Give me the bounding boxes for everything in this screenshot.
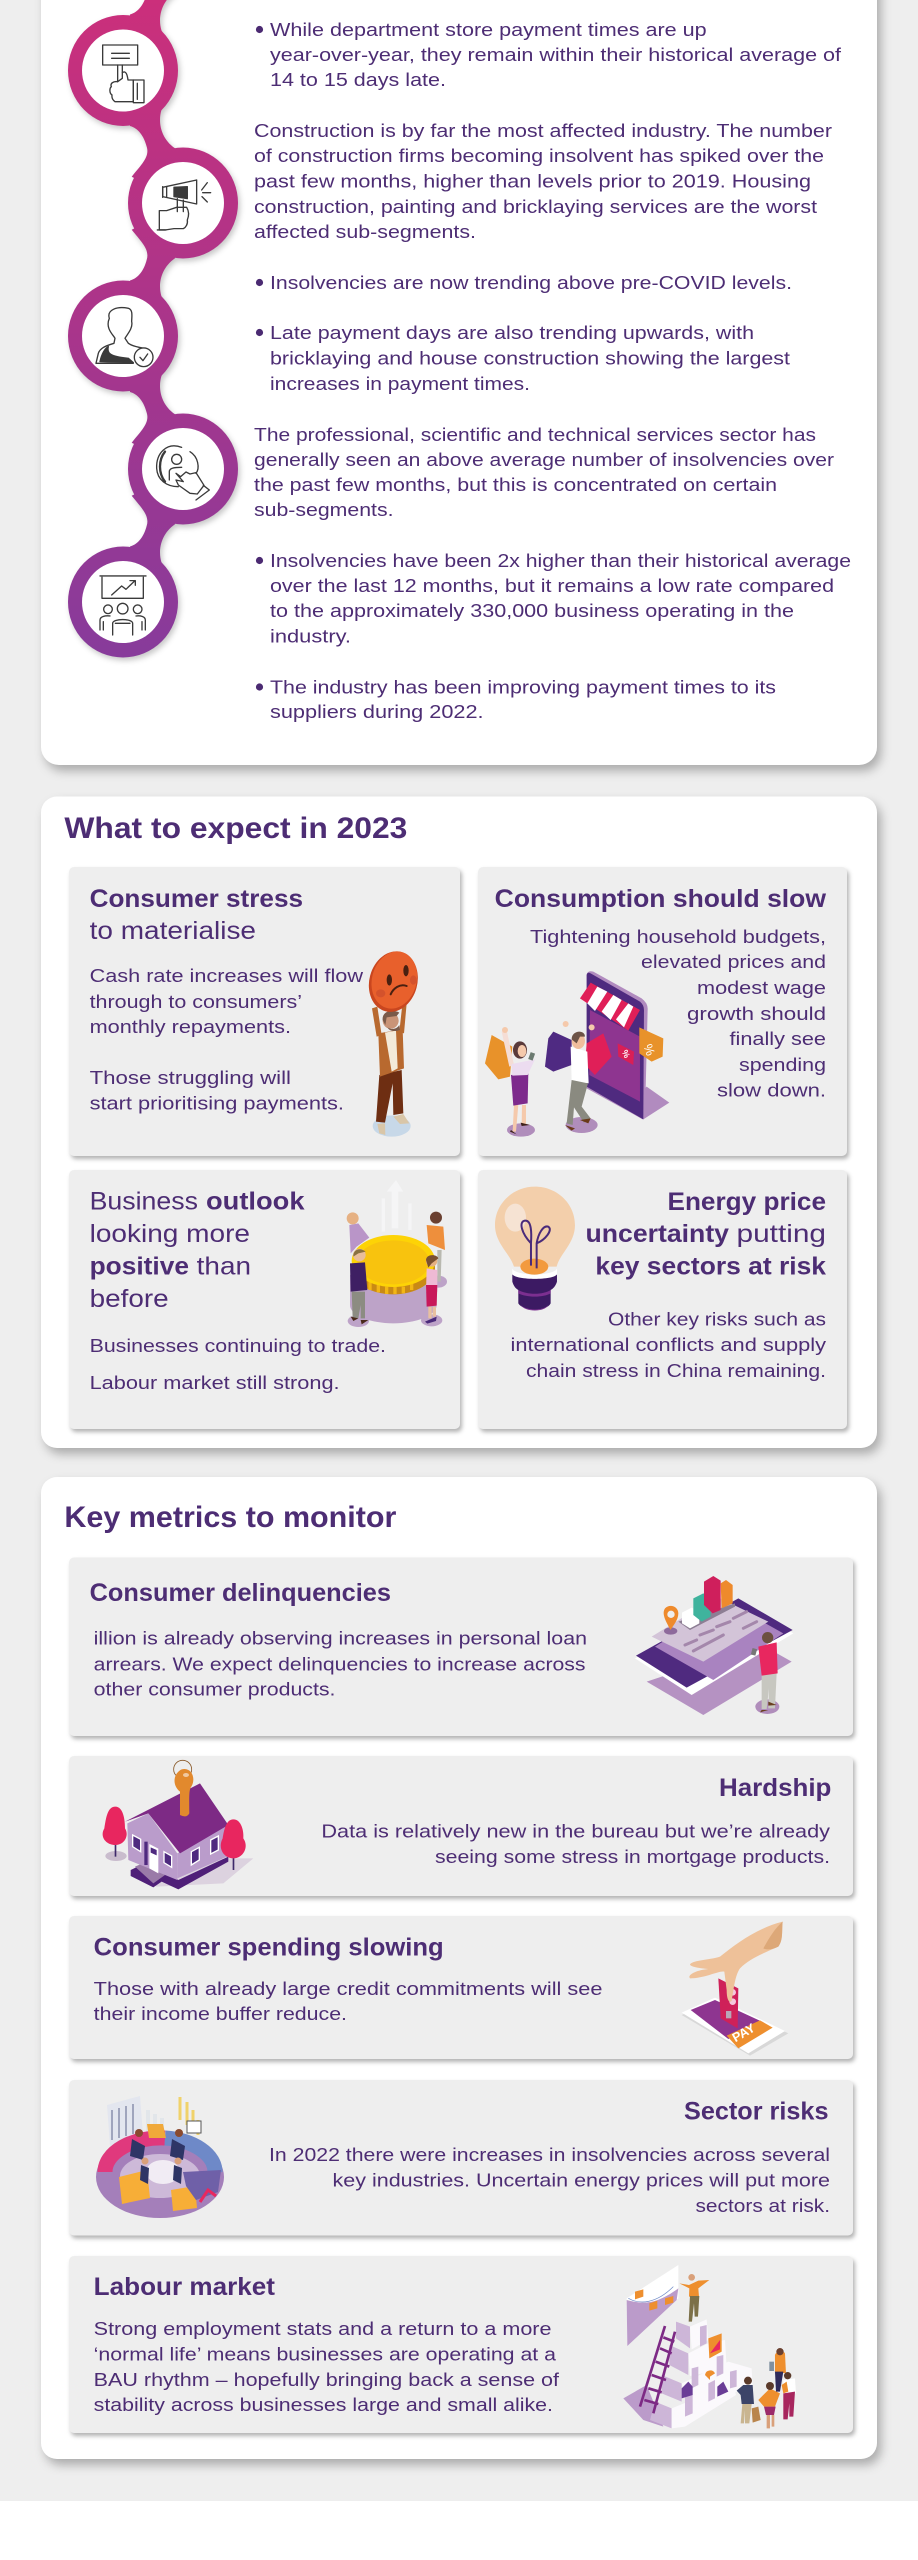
illustration: house with key [103, 1760, 253, 1889]
card: business outlook: outlook [206, 1188, 305, 1216]
text block: professional services: suppliers during 2022. [270, 701, 484, 722]
illustration: hand paying with phone [682, 1922, 788, 2056]
illustration: shoppers and phone store: % [620, 1048, 632, 1060]
text block: professional services: sub-segments. [254, 499, 394, 520]
card: consumer delinquencies: other consumer products. [94, 1679, 336, 1700]
card: consumption should slow: Tightening household budgets, [530, 926, 826, 947]
illustration: hand paying with phone: PAY [730, 2021, 758, 2045]
card: consumption should slow: slow down. [717, 1080, 826, 1100]
icon: person with check badge [96, 308, 153, 367]
card: energy price uncertainty: chain stress in China remaining. [526, 1360, 826, 1381]
card: labour market: Labour market [94, 2273, 276, 2301]
panel: key metrics to monitor [41, 1477, 877, 2459]
panel: what to expect in 2023 [41, 796, 877, 1448]
text block: professional services: Insolvencies have been 2x higher than their historical average [270, 550, 851, 571]
card: energy price uncertainty: Energy price [668, 1188, 826, 1216]
card: consumption should slow: elevated prices and [641, 951, 826, 972]
card: labour market: ‘normal life’ means businesses are operating at a [94, 2344, 557, 2365]
card: consumer delinquencies: Consumer delinquencies [90, 1579, 391, 1607]
card: consumer spending slowing: Consumer spending slowing [94, 1934, 444, 1962]
card: consumer stress: to materialise [90, 917, 256, 945]
card: consumer stress: start prioritising payments. [90, 1092, 344, 1114]
text block: professional services: The professional, scientific and technical services sector has [254, 424, 816, 445]
icon: hand pressing profile [157, 446, 209, 500]
panel: industry insights [41, 0, 877, 765]
card: energy price uncertainty: key sectors at risk [595, 1253, 826, 1281]
card: business outlook: positive [90, 1253, 189, 1281]
icon: hand with megaphone [157, 180, 211, 230]
text block: construction: construction, painting and bricklaying services are the worst [254, 196, 817, 217]
card: business outlook: looking more [90, 1220, 250, 1248]
icon: thumbs up sign [103, 45, 144, 103]
text block: department stores: While department store payment times are up [270, 19, 707, 40]
card: energy price uncertainty: Other key risks such as [608, 1308, 826, 1330]
text block: department stores: 14 to 15 days late. [270, 69, 446, 90]
card: business outlook: than [197, 1253, 251, 1281]
illustration: shoppers and phone store: % [640, 1042, 657, 1058]
card: consumption should slow: Consumption should slow [495, 885, 827, 913]
text block: professional services: industry. [270, 626, 351, 647]
card: labour market [69, 2256, 853, 2433]
card: sector risks: sectors at risk. [696, 2195, 830, 2216]
card: consumption should slow: finally see [730, 1028, 826, 1049]
card: consumer spending slowing [69, 1916, 853, 2059]
card: labour market: Strong employment stats and a return to a more [94, 2318, 551, 2339]
text block: professional services: to the approximately 330,000 business operating in the [270, 600, 794, 621]
text block: professional services: the past few months, but this is concentrated on certain [254, 474, 777, 495]
card: labour market: stability across businesses large and small alike. [94, 2394, 553, 2415]
card: consumer spending slowing: their income buffer reduce. [94, 2003, 347, 2024]
text block: construction: of construction firms becoming insolvent has spiked over the [254, 145, 824, 166]
card: consumer stress [69, 867, 460, 1156]
card: consumption should slow: modest wage [697, 977, 826, 998]
card: energy price uncertainty: international conflicts and supply [510, 1334, 827, 1355]
illustration: shoppers and phone store [485, 971, 669, 1137]
card: sector risks: Sector risks [684, 2098, 828, 2126]
text block: construction: past few months, higher than levels prior to 2019. Housing [254, 170, 811, 192]
card: hardship: Data is relatively new in the bureau but we’re already [321, 1821, 831, 1842]
illustration: man lifting sad face [362, 946, 424, 1137]
card: hardship: Hardship [719, 1774, 831, 1802]
card: business outlook: Business [90, 1188, 198, 1216]
text block: construction: affected sub-segments. [254, 221, 476, 242]
heading: What to expect in 2023 [64, 812, 407, 845]
card: consumer stress: Those struggling will [90, 1067, 291, 1088]
card: consumption should slow [478, 867, 847, 1156]
card: consumption should slow: spending [739, 1054, 826, 1075]
card: consumer spending slowing: Those with already large credit commitments will see [94, 1978, 602, 1999]
text block: construction: bricklaying and house construction showing the largest [270, 348, 790, 369]
illustration: light bulb [495, 1187, 575, 1310]
illustration: pyramid, ladder and team [623, 2265, 796, 2428]
text block: professional services: over the last 12 months, but it remains a low rate compared [270, 575, 834, 596]
icon: presentation with audience [100, 576, 146, 635]
card: labour market: BAU rhythm – hopefully bringing back a sense of [94, 2369, 560, 2390]
illustration: phone with bars and card [635, 1576, 793, 1715]
card: consumer delinquencies [69, 1558, 853, 1736]
text block: professional services: generally seen an above average number of insolvencies over [254, 449, 834, 470]
card: business outlook [69, 1170, 460, 1429]
illustration: people around gold coin [347, 1180, 447, 1327]
card: hardship: seeing some stress in mortgage products. [435, 1846, 830, 1867]
text block: construction: Late payment days are also trending upwards, with [270, 322, 754, 343]
text block: professional services [254, 424, 851, 722]
text block: department stores: year-over-year, they remain within their historical average of [270, 44, 842, 65]
card: business outlook: Businesses continuing to trade. [90, 1335, 386, 1356]
card: sector risks: key industries. Uncertain energy prices will put more [332, 2170, 830, 2190]
card: energy price uncertainty [478, 1170, 847, 1429]
text block: construction: increases in payment times. [270, 373, 530, 394]
card: consumption should slow: growth should [687, 1003, 826, 1024]
card: consumer delinquencies: illion is already observing increases in personal loan [94, 1628, 587, 1649]
text block: department stores [256, 19, 842, 90]
text block: construction [254, 120, 832, 394]
illustration: business team at round table [96, 2096, 224, 2218]
text block: professional services: The industry has been improving payment times to its [270, 676, 776, 697]
card: consumer stress: monthly repayments. [90, 1016, 291, 1037]
text block: construction: Insolvencies are now trending above pre-COVID levels. [270, 272, 792, 293]
card: business outlook: before [90, 1285, 169, 1313]
card: business outlook: Labour market still strong. [90, 1372, 340, 1393]
card: consumer stress: through to consumers’ [90, 991, 302, 1012]
heading: Key metrics to monitor [64, 1501, 397, 1534]
card: consumer delinquencies: arrears. We expect delinquencies to increase across [94, 1653, 585, 1674]
card: sector risks: In 2022 there were increases in insolvencies across several [269, 2144, 830, 2165]
card: energy price uncertainty: uncertainty [586, 1220, 729, 1248]
text block: construction: Construction is by far the most affected industry. The number [254, 120, 832, 141]
card: consumer stress: Consumer stress [90, 885, 303, 913]
card: energy price uncertainty: putting [736, 1220, 826, 1248]
card: consumer stress: Cash rate increases will flow [90, 965, 364, 986]
card: sector risks [69, 2080, 853, 2236]
card: hardship [69, 1756, 853, 1896]
timeline ribbon with icons [68, 0, 238, 658]
